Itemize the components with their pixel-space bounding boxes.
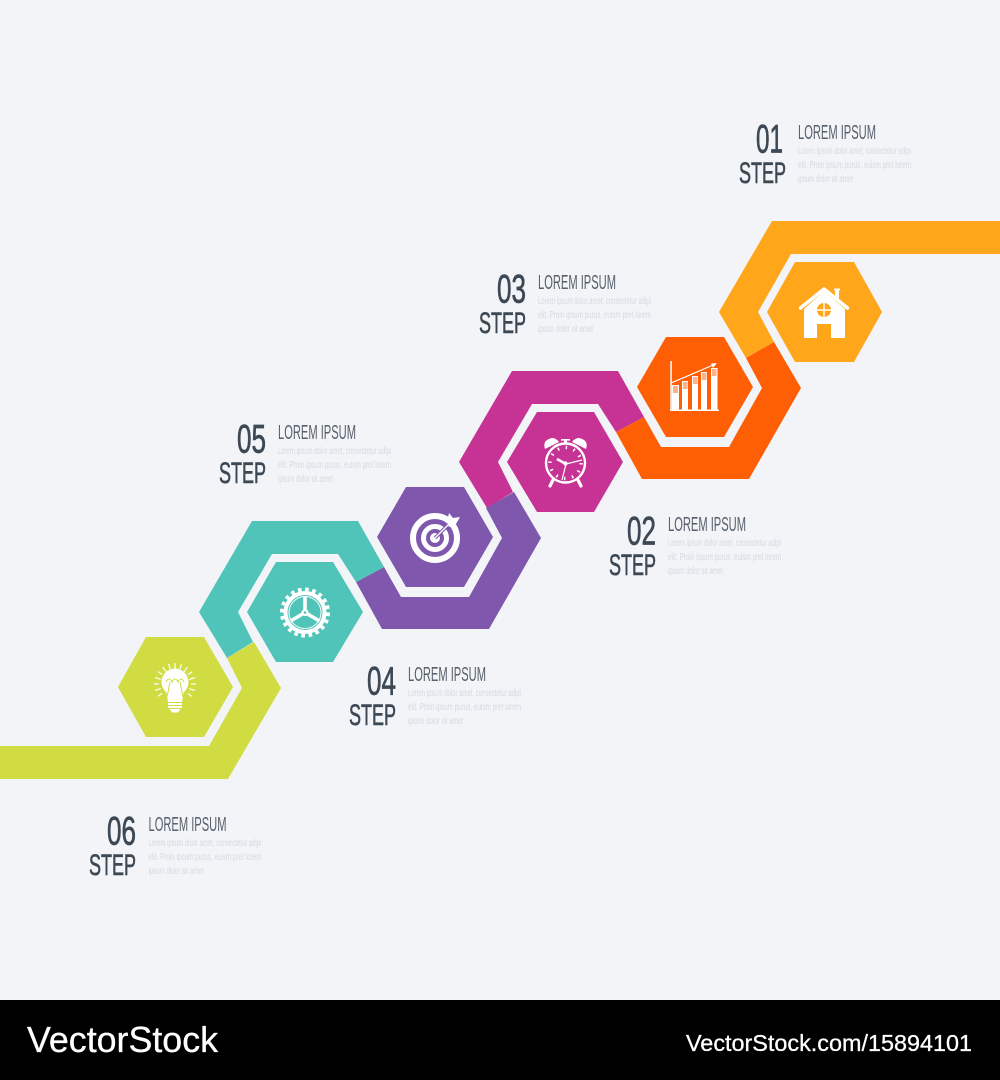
text block: step 01: elit. Proin ipsum purus, euism pret lorem <box>798 160 911 171</box>
ribbon: step 1 yellow-orange band <box>719 221 1000 358</box>
text block: step 06: elit. Proin ipsum purus, euism pret lorem <box>148 852 262 863</box>
text block: step 02: LOREM IPSUM <box>668 514 746 536</box>
ribbon: step 5 teal band <box>199 521 384 658</box>
hexagon: step 6 light bulb <box>118 637 233 737</box>
text block: step 03: 03 <box>497 268 526 312</box>
text block: step 01: LOREM IPSUM <box>798 122 876 144</box>
ribbon: step 6 lime band <box>0 642 281 779</box>
text block: step 02: ipsum dolor sit amet <box>668 566 723 577</box>
text block: step 03: STEP <box>479 307 526 340</box>
text block: step 06: 06 <box>107 810 136 854</box>
text block: step 01 <box>739 118 911 190</box>
text block: step 04 <box>349 660 521 732</box>
text block: step 05: STEP <box>219 457 266 490</box>
icon: house <box>800 288 848 338</box>
text block: step 05: ipsum dolor sit amet <box>278 474 333 485</box>
text block: step 01: Lorem ipsum dolor amet, consectetur adipi <box>798 146 911 157</box>
text block: step 01: ipsum dolor sit amet <box>798 174 853 185</box>
text block: step 02: STEP <box>609 549 656 582</box>
text block: step 04: LOREM IPSUM <box>408 664 486 686</box>
text block: step 06: ipsum dolor sit amet <box>148 866 204 877</box>
text block: step 04: ipsum dolor sit amet <box>408 716 463 727</box>
hexagon: step 5 gear <box>247 562 363 662</box>
text block: step 06: LOREM IPSUM <box>148 814 226 836</box>
text block: step 06: Lorem ipsum dolor amet, consectetur adipi <box>148 838 262 849</box>
hexagon: step 3 clock <box>507 412 623 512</box>
ribbon: step 3 magenta band <box>459 371 644 508</box>
ribbon: step 2 orange band <box>616 342 801 479</box>
text block: step 06 <box>89 810 262 882</box>
text block: step 05: LOREM IPSUM <box>278 422 356 444</box>
ribbon: step 4 purple band <box>356 492 541 629</box>
footer bar <box>0 1000 1000 1080</box>
text block: step 05: 05 <box>237 418 266 462</box>
hexagon: step 2 chart <box>637 337 753 437</box>
hexagon: step 1 home <box>767 262 882 362</box>
icon: target with arrow <box>413 513 460 560</box>
text block: step 03: elit. Proin ipsum purus, euism pret lorem <box>538 310 651 321</box>
text block: step 01: STEP <box>739 157 786 190</box>
text block: step 04: Lorem ipsum dolor amet, consectetur adipi <box>408 688 521 699</box>
text block: step 05: elit. Proin ipsum purus, euism pret lorem <box>278 460 391 471</box>
icon: bar chart <box>670 361 719 411</box>
text block: step 03: Lorem ipsum dolor amet, consectetur adipi <box>538 296 651 307</box>
text block: step 03: LOREM IPSUM <box>538 272 616 294</box>
text block: step 03: ipsum dolor sit amet <box>538 324 593 335</box>
icon: alarm clock <box>544 438 587 486</box>
text block: step 06: STEP <box>89 849 136 882</box>
footer logo text: VectorStock <box>27 1019 219 1060</box>
text block: step 03 <box>479 268 651 340</box>
hexagon: step 4 target <box>377 487 493 587</box>
text block: step 05: Lorem ipsum dolor amet, consectetur adipi <box>278 446 391 457</box>
text block: step 04: elit. Proin ipsum purus, euism pret lorem <box>408 702 521 713</box>
text block: step 05 <box>219 418 391 490</box>
text block: step 02 <box>609 510 781 582</box>
text block: step 02: Lorem ipsum dolor amet, consectetur adipi <box>668 538 781 549</box>
text block: step 04: STEP <box>349 699 396 732</box>
footer image id: VectorStock.com/15894101 <box>686 1030 972 1056</box>
icon: light bulb <box>154 663 196 712</box>
text block: step 04: 04 <box>367 660 396 704</box>
text block: step 01: 01 <box>756 118 783 162</box>
icon: gear <box>282 590 328 636</box>
text block: step 02: 02 <box>627 510 656 554</box>
text block: step 02: elit. Proin ipsum purus, euism pret lorem <box>668 552 781 563</box>
